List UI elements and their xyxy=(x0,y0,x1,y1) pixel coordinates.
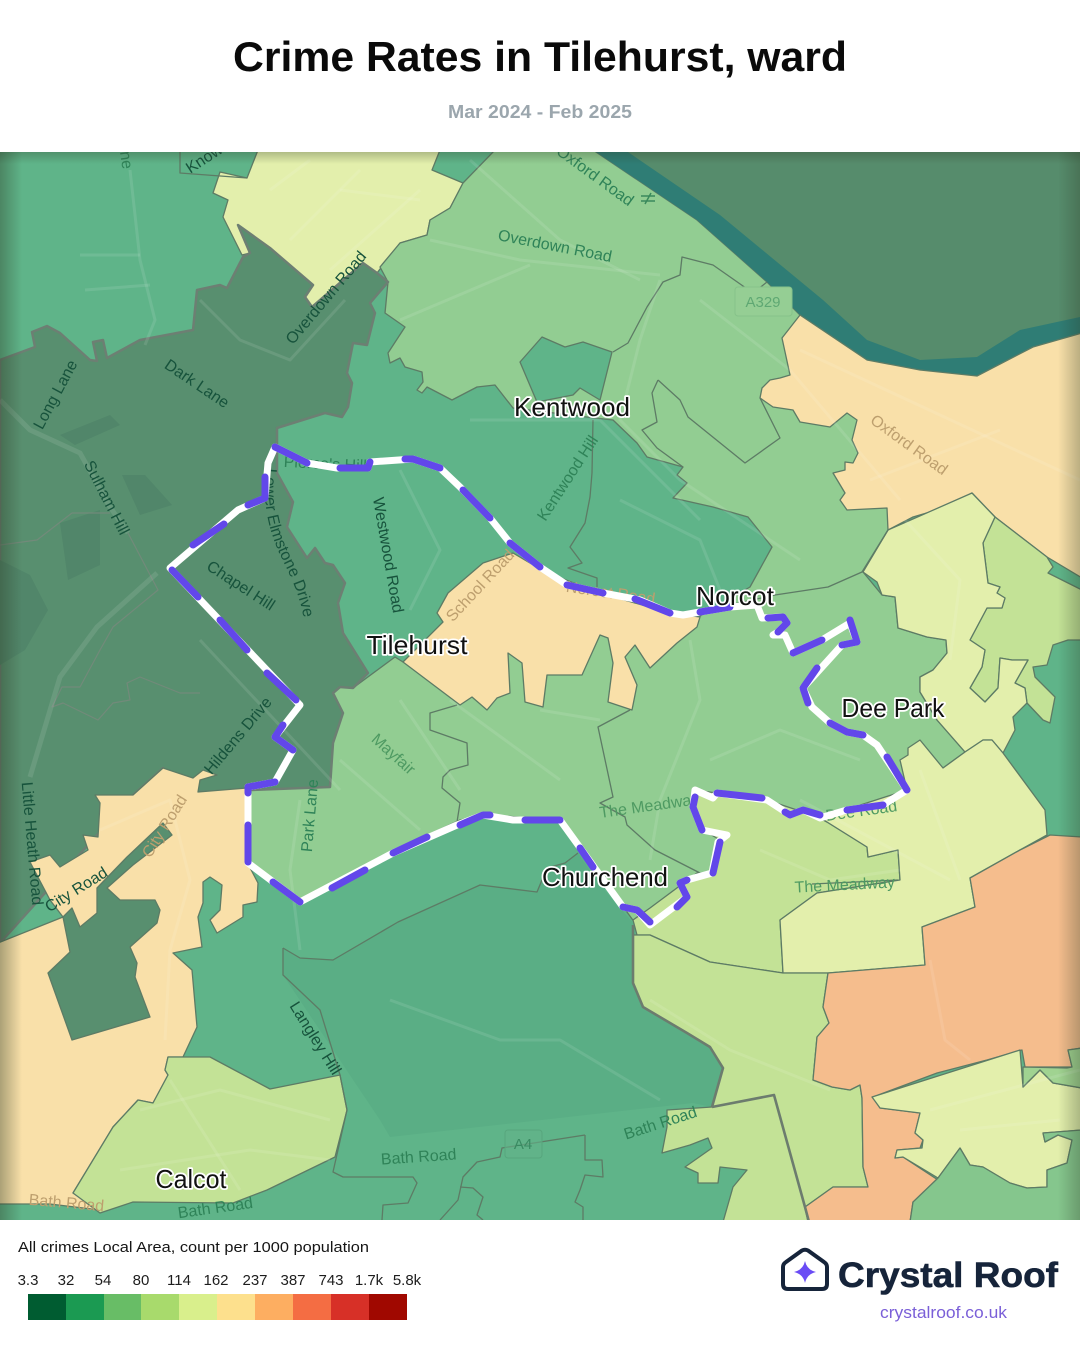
road labels: Know xyxy=(183,141,226,177)
road labels: Oxford Road xyxy=(867,412,950,479)
legend colour swatches xyxy=(28,1294,407,1320)
legend scale values: 3.3 xyxy=(18,1272,38,1289)
legend scale values: 162 xyxy=(203,1272,229,1289)
legend scale values: 5.8k xyxy=(393,1272,422,1289)
woodland shading in dark zone xyxy=(0,415,172,665)
legend scale values: 237 xyxy=(242,1272,268,1289)
thicker grey boundaries xyxy=(633,925,809,1222)
place labels: Kentwood xyxy=(514,392,630,422)
legend heading: All crimes Local Area, count per 1000 population xyxy=(18,1239,369,1256)
road labels: Mayfair xyxy=(368,731,419,779)
legend xyxy=(18,1239,422,1320)
road labels: Kentwood Hill xyxy=(534,433,602,524)
place labels: Churchend xyxy=(542,862,668,892)
road labels: City Road xyxy=(42,864,111,916)
road labels: Hildens Drive xyxy=(201,694,276,778)
legend scale values: 387 xyxy=(280,1272,306,1289)
place labels: Calcot xyxy=(156,1164,227,1194)
road labels: Pierce's Hill xyxy=(283,454,367,475)
legend scale values: 1.7k xyxy=(355,1272,384,1289)
map edge shading xyxy=(0,152,1080,1220)
road badge: A329: A329 xyxy=(745,294,781,311)
website address: crystalroof.co.uk xyxy=(880,1304,1008,1322)
road labels: Chapel Hill xyxy=(203,558,278,614)
road labels: Langley Hill xyxy=(286,999,344,1078)
road labels: Lower Elmstone Drive xyxy=(265,470,312,616)
road badge: A4: A4 xyxy=(514,1136,532,1153)
road labels: Bath Road xyxy=(177,1195,254,1222)
road labels: Dee Road xyxy=(825,798,898,825)
road labels: Little Heath Road xyxy=(18,781,45,906)
road labels: Bath Road xyxy=(28,1192,105,1215)
road badge: A329 xyxy=(735,287,792,316)
road labels: Oxford Road xyxy=(553,143,636,210)
road labels: School Road xyxy=(443,547,518,625)
legend scale values: 80 xyxy=(133,1272,149,1289)
road labels: Overdown Road xyxy=(496,227,613,266)
logo wordmark: Crystal Roof xyxy=(838,1256,1058,1295)
place labels xyxy=(156,392,945,1194)
streets xyxy=(0,160,1080,1190)
road labels: The Meadway xyxy=(598,791,700,822)
place labels: Tilehurst xyxy=(366,630,468,660)
road labels xyxy=(22,152,948,1262)
road labels: The Meadway xyxy=(794,874,895,897)
road labels: Bath Road xyxy=(622,1104,699,1143)
date range subtitle: Mar 2024 - Feb 2025 xyxy=(448,102,632,122)
road labels: Bath Road xyxy=(380,1146,457,1169)
road labels: Lane xyxy=(114,133,135,170)
legend scale values: 114 xyxy=(167,1272,191,1289)
road labels: Long Lane xyxy=(31,357,81,432)
place labels: Dee Park xyxy=(842,693,945,723)
logo: Crystal Roof xyxy=(783,1250,1058,1322)
road badge: A4 xyxy=(505,1130,542,1158)
road labels: Park Lane xyxy=(299,778,322,853)
road labels: Dark Lane xyxy=(161,357,232,412)
legend scale values: 743 xyxy=(318,1272,344,1289)
Tilehurst ward boundary xyxy=(170,447,907,925)
road labels: Overdown Road xyxy=(283,248,370,348)
icon: railway station xyxy=(641,193,655,204)
inner area boundaries xyxy=(180,152,898,1220)
legend scale values: 54 xyxy=(95,1272,111,1289)
place labels: Norcot xyxy=(696,581,775,611)
map zones xyxy=(0,150,1080,1222)
legend scale values: 32 xyxy=(58,1272,74,1289)
road labels: Sulham Hill xyxy=(80,458,132,538)
road labels: Norcot Road xyxy=(565,579,656,608)
title: Crime Rates in Tilehurst, ward xyxy=(233,33,847,80)
road labels: City Road xyxy=(139,792,191,861)
icon: house with star xyxy=(783,1250,827,1289)
road labels: Westwood Road xyxy=(369,496,406,614)
faint parish lines in dark zone xyxy=(0,513,200,720)
legend scale values xyxy=(18,1272,422,1289)
